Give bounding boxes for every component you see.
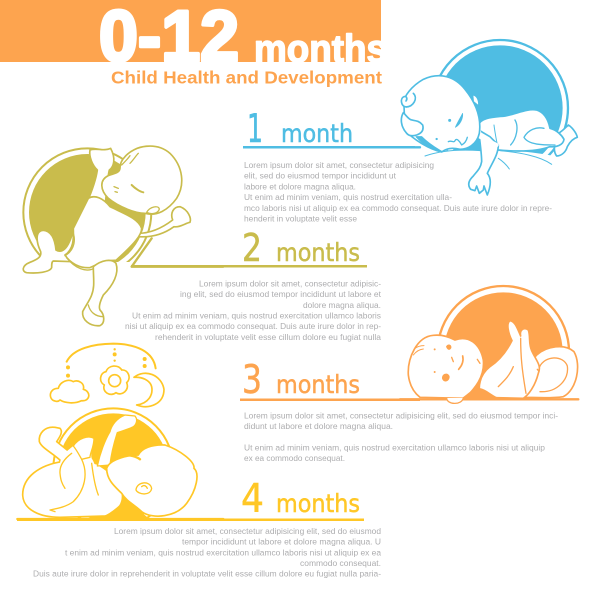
body: [23, 453, 123, 517]
text block: month 4: commodo consequat.: [300, 558, 381, 568]
hill: [463, 389, 500, 399]
text block: month 3: [244, 410, 558, 463]
header banner: [0, 0, 381, 62]
text block: month 3: Lorem ipsum dolor sit amet, consectetur adipisicing elit, sed do eiusmod tempor inci-: [244, 410, 558, 420]
text block: month 1: [244, 160, 552, 224]
arm and hand: [469, 130, 498, 195]
foot: [554, 125, 577, 156]
text block: month 2: ing elit, sed do eiusmod tempor incididunt ut labore et: [180, 289, 382, 299]
text block: month 1: Ut enim ad minim veniam, quis nostrud exercitation ulla-: [244, 192, 452, 202]
text block: month 4: t enim ad minim veniam, quis nostrud exercitation ullamco laboris nisi ut aliquip ex ea: [65, 548, 381, 558]
torso and leg: [478, 110, 564, 151]
text block: month 2: dolore magna aliqua.: [303, 300, 381, 310]
text block: month 2: [125, 278, 382, 342]
leg, upper left: [23, 230, 73, 273]
heading: 1 month: [243, 107, 415, 152]
heading: 4 months: months: [276, 489, 360, 518]
text block: month 2: Ut enim ad minim veniam, quis nostrud exercitation ullamco laboris: [132, 310, 381, 320]
hill: [104, 501, 148, 519]
heading: 1 month: month: [281, 119, 353, 148]
text block: month 1: elit, sed do eiusmod tempor incididunt ut: [244, 170, 397, 180]
heading: 1 month: 1: [247, 107, 263, 152]
ground line: [380, 144, 420, 151]
heading: 2 months: [131, 226, 367, 270]
text block: month 3: didunt ut labore et dolore magna aliqua.: [244, 421, 393, 431]
heading: 4 months: 4: [241, 477, 264, 522]
title: 0-12 months: months: [254, 28, 387, 71]
text block: month 4: [33, 526, 381, 578]
leg and foot: [479, 321, 539, 398]
text block: month 1: labore et dolore magna aliqua.: [244, 182, 356, 192]
ground line: [132, 238, 223, 267]
ground line: [17, 515, 223, 522]
head: [107, 445, 197, 516]
text block: month 4: Duis aute irure dolor in reprehenderit in voluptate velit esse cillum dolore eu fugiat nulla paria-: [33, 568, 381, 578]
hand under cheek: [401, 113, 423, 136]
arm up: [87, 148, 114, 207]
ground creases: [425, 150, 552, 169]
diaper: [525, 347, 578, 398]
illustration: baby holding feet, orange: [400, 286, 578, 417]
heading: 2 months: 2: [242, 226, 262, 270]
illustration: baby under mobile, yellow: [17, 344, 223, 528]
text block: month 2: rehenderit in voluptate velit esse cillum dolore eu fugiat nulla: [155, 332, 381, 342]
knee bump: [39, 427, 73, 462]
arm right: [138, 207, 190, 237]
torso: [65, 197, 142, 268]
heading: 3 months: [240, 358, 420, 403]
text block: month 2: Lorem ipsum dolor sit amet, consectetur adipisic-: [199, 278, 381, 288]
text block: month 2: nisi ut aliquip ex ea commodo consequat. Duis aute irure dolor in rep-: [125, 321, 381, 331]
arm: [97, 415, 137, 466]
ground line: [400, 396, 578, 403]
mobile arc and beads: [66, 344, 156, 378]
subtitle: Child Health and Development: [111, 68, 382, 88]
head: [404, 76, 480, 152]
text block: month 1: Lorem ipsum dolor sit amet, consectetur adipisicing: [244, 160, 434, 170]
text block: month 1: henderit in voluptate velit esse: [244, 214, 357, 224]
illustration: sleeping baby, blue: [380, 40, 577, 195]
text block: month 3: Ut enim ad minim veniam, quis nostrud exercitation ullamco laboris nisi ut aliquip: [244, 442, 545, 452]
leg, lower: [83, 260, 117, 326]
mobile: moon: [134, 373, 164, 407]
heading: 3 months: 3: [242, 358, 262, 403]
illustration: baby, olive: [23, 146, 223, 326]
heading: 4 months: [17, 477, 364, 522]
title: 0-12 months: [100, 8, 381, 62]
head: [102, 146, 182, 214]
chin: [447, 398, 463, 403]
heading: 2 months: months: [276, 238, 360, 267]
heading: 3 months: months: [276, 370, 360, 399]
mobile: flower: [101, 366, 129, 394]
leg and foot: [60, 437, 99, 503]
text block: month 3: ex ea commodo consequat.: [244, 453, 345, 463]
text block: month 4: Lorem ipsum dolor sit amet, consectetur adipisicing elit, sed do eiusmod: [114, 526, 381, 536]
mobile: cloud: [50, 380, 89, 403]
dome: [53, 408, 173, 528]
head: [408, 335, 484, 398]
text block: month 1: mco laboris nisi ut aliquip ex ea commodo consequat. Duis aute irure dolor in repre-: [244, 203, 552, 213]
text block: month 4: tempor incididunt ut labore et dolore magna aliqua. U: [182, 536, 381, 546]
